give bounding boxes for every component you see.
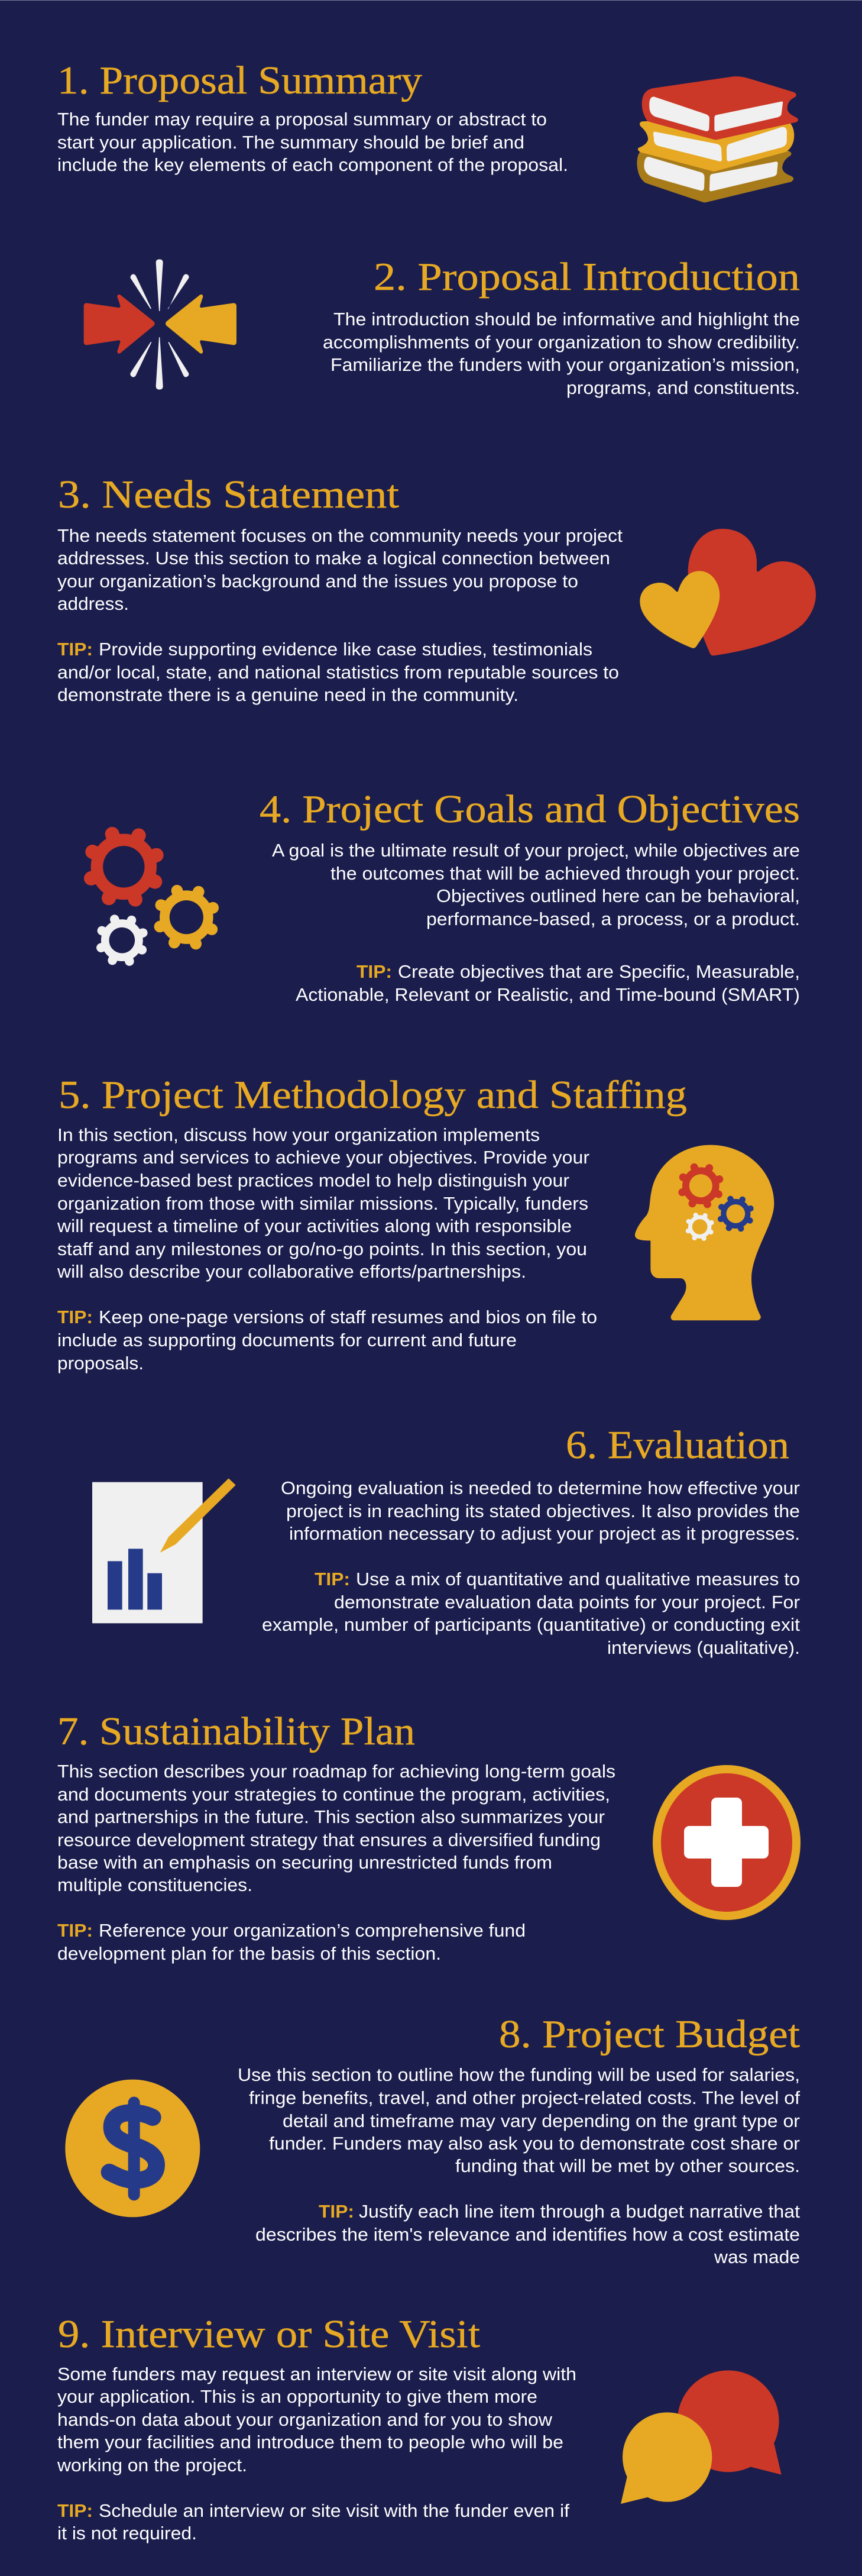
text block: goals tip: Create objectives that are Specific, Measurable,	[398, 961, 800, 982]
text block: methodology description: programs and services to achieve your objectives. Provide your	[57, 1147, 589, 1168]
text block: needs description: address.	[57, 593, 129, 614]
text block: evaluation description	[281, 1478, 800, 1544]
text block: methodology description: will request a timeline of your activities along with responsible	[57, 1216, 572, 1236]
text block: budget description: funder. Funders may also ask you to demonstrate cost share or	[269, 2133, 800, 2154]
heading: evaluation: 6. Evaluation	[566, 1423, 789, 1467]
text block: methodology description: organization from those with similar missions. Typically, funders	[57, 1193, 588, 1214]
text block: introduction description: Familiarize the funders with your organization’s mission,	[330, 354, 800, 375]
panel: 5. project methodology and staffing	[57, 1073, 774, 1373]
text block: interview tip: TIP:	[57, 2500, 93, 2521]
text block: methodology description	[57, 1124, 589, 1282]
text block: needs description: The needs statement focuses on the community needs your project	[57, 525, 623, 546]
text block: budget description: detail and timeframe may vary depending on the grant type or	[283, 2110, 800, 2131]
heading: proposal introduction: 2. Proposal Introduction	[374, 255, 800, 299]
text block: summary description: include the key elements of each component of the proposal.	[57, 154, 568, 175]
text block: introduction description: programs, and constituents.	[566, 377, 800, 398]
text block: introduction description: The introduction should be informative and highlight the	[333, 309, 800, 329]
icon: dollar coin	[65, 2080, 200, 2217]
text block: evaluation tip: Use a mix of quantitative and qualitative measures to	[356, 1569, 800, 1589]
text block: interview description: them your facilities and introduce them to people who will be	[57, 2432, 563, 2452]
text block: goals tip: Actionable, Relevant or Realistic, and Time-bound (SMART)	[296, 984, 800, 1005]
text block: interview description: your application. This is an opportunity to give them more	[57, 2386, 537, 2407]
text block: sustainability description: and partnerships in the future. This section also summarizes your	[57, 1806, 605, 1827]
text block: goals tip: TIP:	[357, 961, 392, 982]
icon: three gears	[89, 832, 215, 962]
panel: 6. evaluation	[92, 1423, 800, 1658]
text block: goals description: A goal is the ultimate result of your project, while objectives are	[272, 840, 800, 861]
text block: budget description: Use this section to outline how the funding will be used for salaries,	[238, 2064, 800, 2085]
text block: budget description	[238, 2064, 800, 2176]
icon: speech bubbles	[621, 2370, 782, 2504]
text block: needs tip: TIP:	[57, 639, 93, 660]
text block: goals description: the outcomes that will be achieved through your project.	[330, 863, 800, 884]
icon: report page with bar chart and pencil	[92, 1478, 236, 1623]
text block: sustainability description: resource development strategy that ensures a diversified funding	[57, 1830, 601, 1850]
text block: evaluation tip: interviews (qualitative).	[607, 1637, 800, 1658]
text block: budget tip: Justify each line item through a budget narrative that	[359, 2201, 800, 2222]
text block: methodology description: staff and any milestones or go/no-go points. In this section, you	[57, 1239, 587, 1259]
panel: 3. needs statement	[57, 473, 816, 705]
icon: head with gears	[635, 1145, 774, 1320]
text block: interview description: Some funders may request an interview or site visit along with	[57, 2364, 576, 2384]
text block: interview description: working on the project.	[57, 2455, 247, 2475]
text block: needs description	[57, 525, 623, 614]
text block: sustainability tip	[57, 1920, 526, 1964]
text block: sustainability description: This section describes your roadmap for achieving long-term goals	[57, 1761, 615, 1782]
text block: summary description: start your application. The summary should be brief and	[57, 132, 524, 153]
text block: interview tip	[57, 2500, 569, 2543]
text block: sustainability description: multiple constituencies.	[57, 1874, 252, 1895]
text block: introduction description: accomplishments of your organization to show credibility.	[323, 332, 800, 353]
text block: budget tip: describes the item's relevance and identifies how a cost estimate	[255, 2224, 800, 2245]
text block: methodology tip: Keep one-page versions of staff resumes and bios on file to	[99, 1307, 597, 1327]
text block: goals description: performance-based, a process, or a product.	[426, 909, 800, 929]
text block: summary description: The funder may require a proposal summary or abstract to	[57, 109, 547, 130]
text block: interview description	[57, 2364, 576, 2475]
text block: sustainability tip: Reference your organization’s comprehensive fund	[99, 1920, 526, 1941]
text block: sustainability tip: TIP:	[57, 1920, 93, 1941]
icon: medical cross badge	[653, 1765, 801, 1920]
text block: needs tip: and/or local, state, and national statistics from reputable sources to	[57, 662, 619, 683]
text block: interview tip: it is not required.	[57, 2523, 197, 2543]
text block: interview tip: Schedule an interview or site visit with the funder even if	[99, 2500, 569, 2521]
panel: 9. interview or site visit	[57, 2312, 782, 2543]
text block: needs description: addresses. Use this section to make a logical connection between	[57, 548, 610, 568]
heading: project goals and objectives: 4. Project Goals and Objectives	[260, 787, 800, 831]
text block: evaluation tip	[262, 1569, 800, 1658]
text block: budget tip: TIP:	[319, 2201, 354, 2222]
text block: introduction description	[323, 309, 800, 398]
text block: budget tip	[255, 2201, 800, 2267]
icon: converging arrows with rays	[84, 259, 236, 390]
text block: budget description: fringe benefits, travel, and other project-related costs. The level of	[249, 2087, 800, 2108]
text block: interview description: hands-on data about your organization and for you to show	[57, 2409, 553, 2430]
text block: methodology tip: TIP:	[57, 1307, 93, 1327]
text block: goals tip	[296, 961, 800, 1005]
text block: sustainability description	[57, 1761, 615, 1895]
text block: needs tip	[57, 639, 619, 705]
heading: interview or site visit: 9. Interview or Site Visit	[58, 2312, 480, 2356]
text block: evaluation description: project is in reaching its stated objectives. It also provides the	[286, 1501, 800, 1521]
panel: 1. proposal summary	[57, 59, 798, 202]
panel: 7. sustainability plan	[57, 1709, 801, 1964]
text block: sustainability tip: development plan for the basis of this section.	[57, 1943, 441, 1964]
text block: evaluation tip: demonstrate evaluation data points for your project. For	[334, 1592, 800, 1612]
panel: 4. project goals and objectives	[89, 787, 800, 1005]
text block: evaluation tip: example, number of participants (quantitative) or conducting exit	[262, 1614, 800, 1635]
text block: methodology tip	[57, 1307, 597, 1373]
text block: methodology description: evidence-based best practices model to help distinguish your	[57, 1170, 569, 1191]
text block: budget tip: was made	[714, 2247, 800, 2267]
text block: methodology tip: include as supporting documents for current and future	[57, 1330, 517, 1350]
heading: needs statement: 3. Needs Statement	[58, 473, 399, 516]
icon: two hearts	[640, 529, 816, 655]
text block: needs description: your organization’s background and the issues you propose to	[57, 571, 578, 592]
text block: needs tip: Provide supporting evidence like case studies, testimonials	[99, 639, 592, 660]
panel: 8. project budget	[65, 2012, 800, 2267]
text block: methodology description: will also describe your collaborative efforts/partnerships.	[57, 1261, 526, 1282]
text block: summary description	[57, 109, 568, 175]
heading: sustainability plan: 7. Sustainability Plan	[57, 1709, 415, 1753]
heading: proposal summary: 1. Proposal Summary	[57, 59, 423, 102]
text block: goals description	[272, 840, 800, 929]
text block: needs tip: demonstrate there is a genuine need in the community.	[57, 684, 519, 705]
heading: project methodology and staffing: 5. Project Methodology and Staffing	[59, 1073, 687, 1117]
panel: 2. proposal introduction	[84, 255, 800, 398]
heading: project budget: 8. Project Budget	[499, 2012, 800, 2056]
text block: sustainability description: and documents your strategies to continue the program, activities,	[57, 1784, 610, 1805]
text block: goals description: Objectives outlined here can be behavioral,	[436, 885, 800, 906]
text block: evaluation description: Ongoing evaluation is needed to determine how effective your	[281, 1478, 800, 1498]
icon: stack of books	[637, 76, 798, 202]
text block: budget description: funding that will be met by other sources.	[455, 2155, 800, 2176]
text block: methodology tip: proposals.	[57, 1353, 144, 1373]
text block: evaluation tip: TIP:	[315, 1569, 350, 1589]
text block: methodology description: In this section, discuss how your organization implements	[57, 1124, 540, 1145]
text block: sustainability description: base with an emphasis on securing unrestricted funds from	[57, 1852, 552, 1873]
text block: evaluation description: information necessary to adjust your project as it progresses.	[289, 1523, 800, 1544]
